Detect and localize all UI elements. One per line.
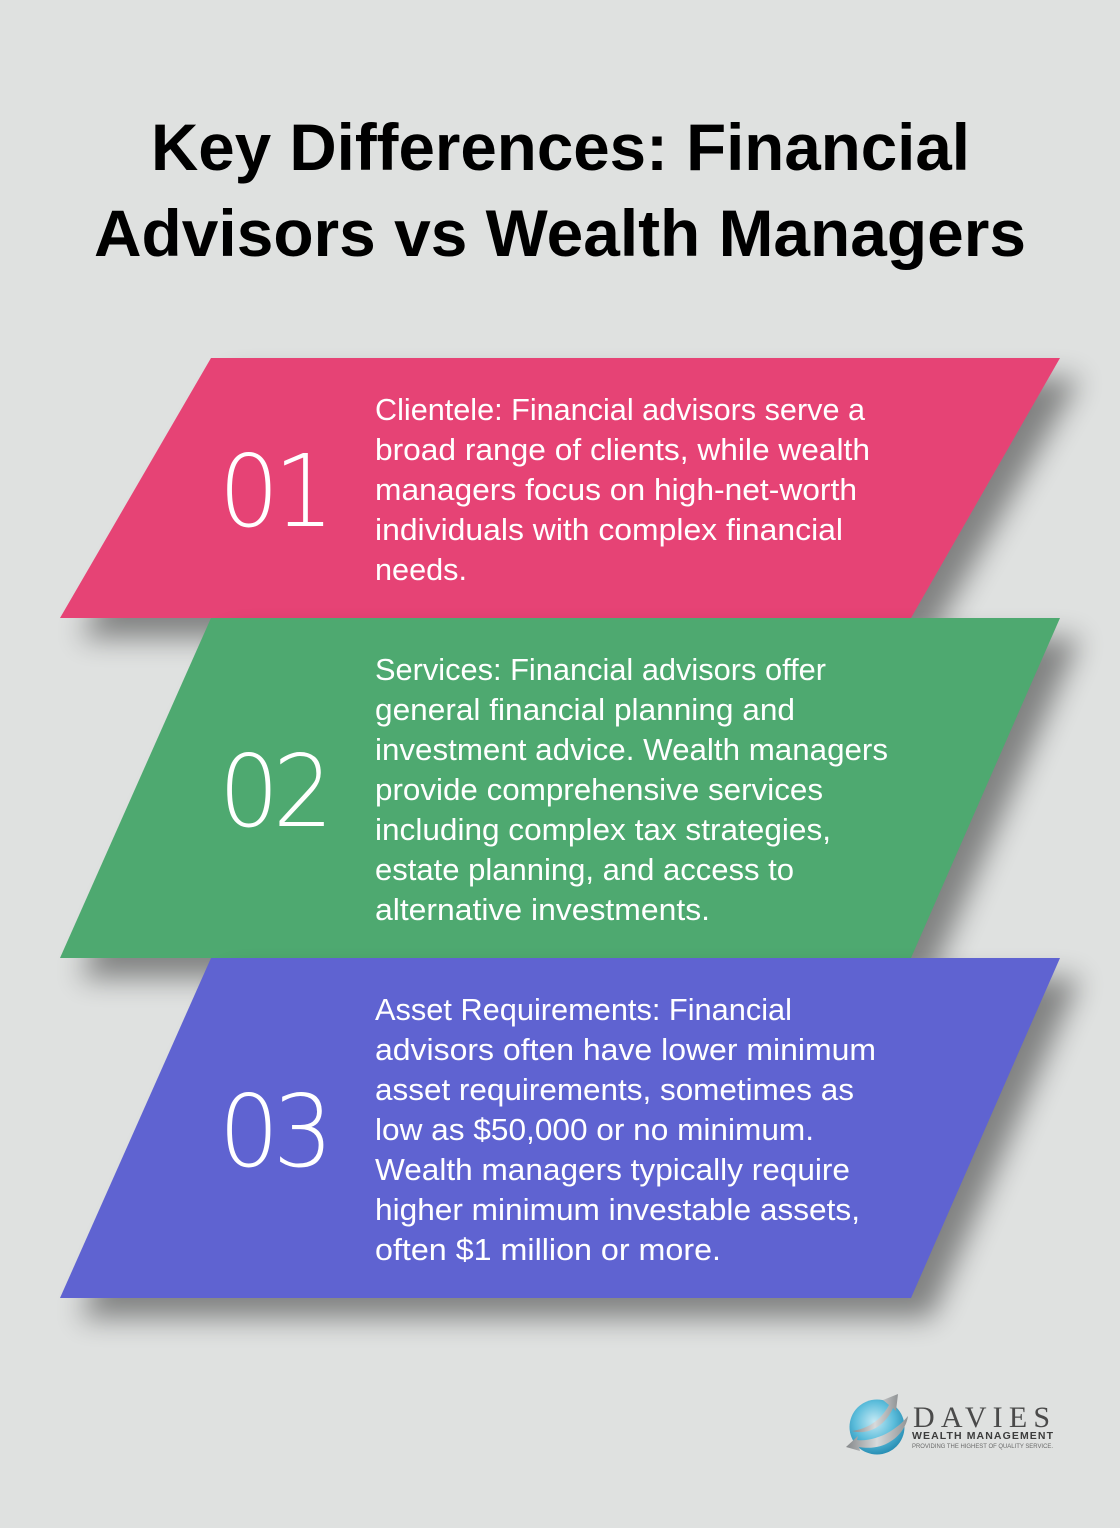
text: asset requirements: higher minimum investable assets, (375, 1192, 860, 1227)
text: asset requirements: asset requirements, sometimes as (375, 1072, 854, 1107)
text: clientele: needs. (375, 552, 467, 587)
text: clientele: managers focus on high-net-worth (375, 472, 857, 507)
text: clientele: broad range of clients, while wealth (375, 432, 870, 467)
number 01: 01 (219, 434, 334, 551)
title: Key Differences: Financial (151, 110, 970, 184)
icon: globe with arrows (846, 1394, 908, 1454)
text: asset requirements: often $1 million or more. (375, 1232, 721, 1267)
wordmark: DAVIES (913, 1401, 1050, 1434)
logo: Davies Wealth Management (846, 1394, 1054, 1454)
text: asset requirements: Asset Requirements: Financial (375, 992, 792, 1027)
text: clientele: Clientele: Financial advisors serve a (375, 392, 866, 427)
title (94, 110, 1026, 270)
text: services: including complex tax strategies, (375, 812, 831, 847)
text: services: Services: Financial advisors offer (375, 652, 826, 687)
text: clientele (375, 392, 870, 587)
text: asset requirements: low as $50,000 or no minimum. (375, 1112, 814, 1147)
number 03: 03 (219, 1074, 333, 1191)
panel: asset requirements (60, 958, 1080, 1318)
logo: Davies Wealth Management: WEALTH MANAGEMENT (912, 1430, 1054, 1442)
text: asset requirements: advisors often have lower minimum (375, 1032, 876, 1067)
title: Advisors vs Wealth Managers (94, 196, 1026, 270)
text: services: alternative investments. (375, 892, 710, 927)
text: services: provide comprehensive services (375, 772, 823, 807)
logo: Davies Wealth Management: PROVIDING THE HIGHEST OF QUALITY SERVICE. (912, 1443, 1053, 1450)
text: services: general financial planning and (375, 692, 795, 727)
text: asset requirements (375, 992, 876, 1267)
text: services: estate planning, and access to (375, 852, 794, 887)
text: asset requirements: Wealth managers typically require (375, 1152, 850, 1187)
number 02: 02 (219, 734, 333, 851)
text: services: investment advice. Wealth managers (375, 732, 888, 767)
text: clientele: individuals with complex financial (375, 512, 843, 547)
panel: services (60, 618, 1080, 978)
text: services (375, 652, 888, 927)
panel: clientele (60, 358, 1080, 638)
